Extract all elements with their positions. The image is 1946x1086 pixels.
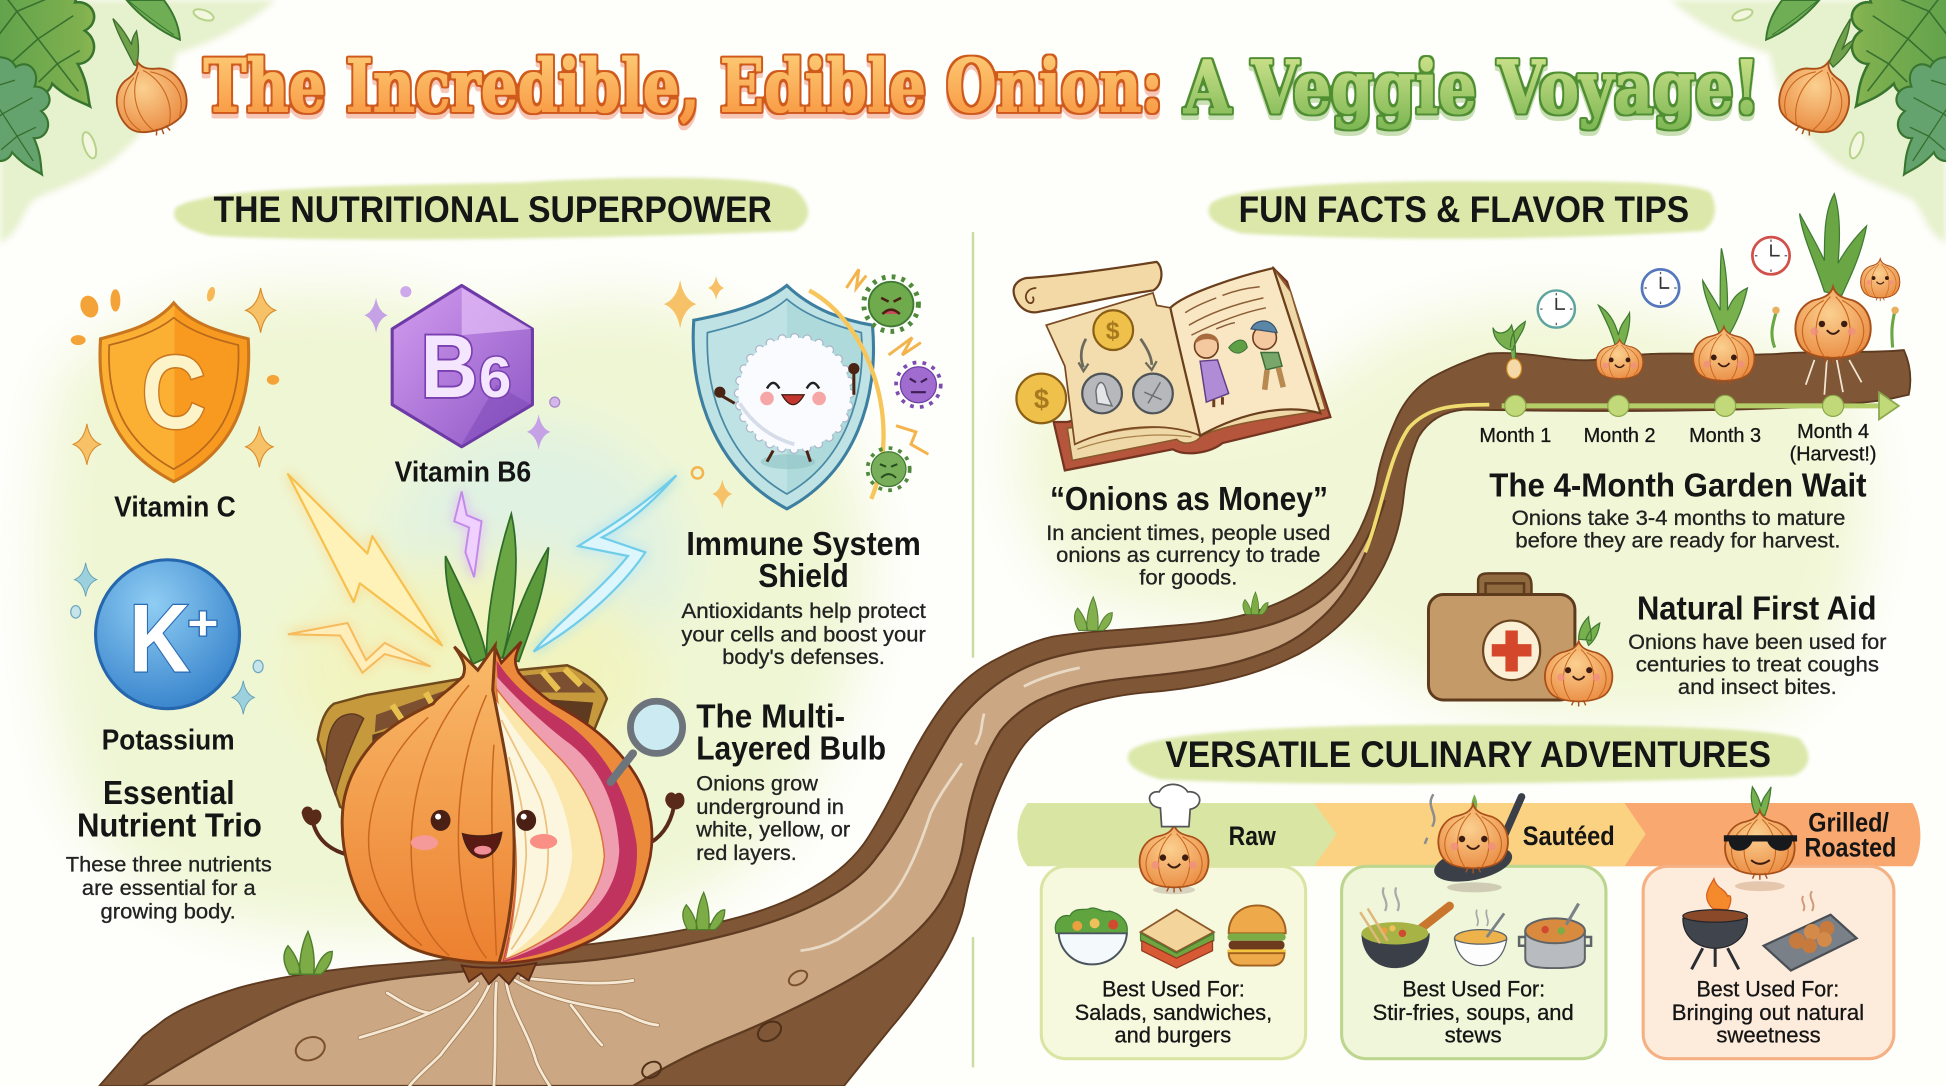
month labels: Month 4	[1797, 420, 1869, 443]
icon: wok	[1360, 887, 1450, 968]
chart: growth timeline	[1479, 194, 1900, 465]
text block: garden wait: before they are ready for harvest.	[1515, 529, 1841, 552]
card text: Best Used For:	[1402, 977, 1545, 1002]
panel: sauteed card	[1342, 794, 1606, 1059]
panel: fun facts heading: FUN FACTS & FLAVOR TIPS	[1239, 188, 1689, 230]
timeline arrow with month nodes	[1502, 392, 1899, 420]
chart: cooking method banner	[1017, 803, 1920, 866]
panel: nutritional superpower heading: THE NUTRITIONAL SUPERPOWER	[213, 188, 772, 230]
road highlights	[800, 668, 1080, 951]
text block: essential nutrient trio: Essential	[103, 775, 235, 812]
text block: garden wait	[1489, 467, 1867, 552]
book cover	[1054, 268, 1330, 470]
month labels: (Harvest!)	[1790, 442, 1876, 465]
card text: Best Used For:	[1102, 977, 1245, 1002]
icon: burger	[1227, 905, 1286, 966]
trading people	[1195, 334, 1218, 358]
tan inner road	[143, 500, 1385, 1086]
scroll	[1014, 262, 1161, 312]
onion right half with red layers	[493, 642, 652, 963]
icon: title onion right	[1769, 19, 1861, 146]
text block: multi-layered bulb	[695, 698, 886, 865]
label: sauteed: Sautéed	[1523, 821, 1615, 851]
icon: history book with coins: $	[1106, 318, 1120, 345]
magnifying glass	[611, 701, 683, 782]
text block: multi-layered bulb: underground in	[696, 796, 844, 819]
watercolor wash: nutrition area	[45, 291, 868, 934]
text block: essential nutrient trio	[66, 775, 272, 923]
icon: potassium circle: +	[187, 596, 218, 649]
text block: natural first aid: Onions have been used for	[1628, 631, 1886, 654]
text block: multi-layered bulb: Onions grow	[696, 773, 819, 796]
card text	[1373, 977, 1574, 1048]
month 2 onion	[1596, 305, 1643, 382]
text block: immune system shield: Immune System	[686, 526, 921, 563]
label: grilled roasted: Roasted	[1805, 832, 1896, 862]
coins	[1093, 310, 1133, 350]
icon: title onion left	[105, 19, 196, 146]
panel: culinary adventures heading: VERSATILE CULINARY ADVENTURES	[1165, 733, 1771, 775]
card text: and burgers	[1114, 1023, 1231, 1048]
onion stages	[1493, 194, 1899, 395]
divider	[972, 232, 974, 1067]
brown path: the voyage road	[99, 350, 1910, 1086]
text block: garden wait: Onions take 3-4 months to mature	[1512, 507, 1845, 530]
panel: fun facts heading	[1208, 181, 1715, 239]
text block: garden wait: The 4-Month Garden Wait	[1489, 467, 1867, 504]
icon: onion in frying pan	[1425, 794, 1522, 892]
month 1 sprout	[1493, 321, 1525, 379]
icon: grill	[1683, 879, 1747, 969]
icon: history book with coins	[1014, 262, 1330, 470]
text block: immune system shield: Antioxidants help protect	[681, 600, 926, 623]
panel: culinary adventures heading	[1128, 725, 1808, 784]
label: raw: Raw	[1229, 821, 1276, 851]
month 4 onion	[1772, 194, 1899, 395]
panel: grilled card	[1643, 787, 1894, 1059]
yellow route line	[1365, 405, 1489, 552]
decorative corner: top right leaves	[1670, 0, 1946, 243]
icon: onion mascot explorer	[302, 514, 684, 1086]
label: vitamin B6: Vitamin B6	[395, 457, 531, 489]
card text: sweetness	[1716, 1023, 1821, 1048]
title: A Veggie Voyage!	[1183, 45, 1760, 131]
text block: immune system shield	[681, 526, 926, 669]
icon: stew pot	[1519, 904, 1591, 968]
text block: immune system shield: your cells and boost your	[681, 624, 926, 647]
icon: vitamin C shield	[71, 286, 279, 482]
card text: Salads, sandwiches,	[1075, 1000, 1272, 1025]
icon: immune shield with cell and germs	[664, 269, 941, 509]
icon: first aid kit with onion	[1428, 573, 1612, 706]
card text	[1075, 977, 1272, 1048]
icon: vitamin B6 hexagon	[364, 285, 560, 450]
text block: onions as money: for goods.	[1139, 567, 1237, 590]
text block: natural first aid	[1628, 590, 1886, 699]
right page	[1170, 268, 1320, 436]
month 3 onion	[1693, 248, 1754, 385]
text block: natural first aid: and insect bites.	[1678, 676, 1837, 699]
arms	[313, 807, 674, 855]
small floating onion	[1861, 259, 1900, 301]
text block: multi-layered bulb: The Multi-	[696, 698, 845, 735]
month labels: Month 1	[1479, 424, 1551, 447]
text block: onions as money: “Onions as Money”	[1050, 481, 1328, 518]
label: grilled roasted	[1805, 808, 1896, 862]
icon: salad	[1055, 908, 1127, 964]
backpack chest	[318, 665, 607, 819]
text block: essential nutrient trio: These three nutrients	[66, 853, 272, 876]
label: grilled roasted: Grilled/	[1808, 808, 1889, 838]
onion left half	[342, 645, 514, 963]
card text: Best Used For:	[1697, 977, 1839, 1002]
sprout leaves	[445, 556, 486, 664]
text block: immune system shield: body's defenses.	[722, 646, 885, 669]
icon: roasting tray	[1764, 891, 1857, 971]
card text: stews	[1445, 1023, 1502, 1048]
grass tufts	[284, 592, 1268, 974]
card text: Bringing out natural	[1672, 1000, 1864, 1025]
watercolor wash: facts area	[1018, 307, 1867, 719]
decorative corner: top left leaves	[0, 0, 276, 243]
text block: essential nutrient trio: growing body.	[101, 900, 236, 923]
icon: vitamin B6 hexagon: B	[421, 316, 478, 416]
icon: vitamin B6 hexagon: 6	[479, 346, 511, 410]
icon: vitamin C shield: C	[141, 335, 206, 451]
icon: potassium circle: K	[129, 583, 190, 692]
icon: energy bolts	[288, 474, 676, 673]
text block: onions as money: In ancient times, people used	[1046, 522, 1330, 545]
card text: Stir-fries, soups, and	[1373, 1000, 1574, 1025]
icon: potassium circle	[71, 560, 263, 714]
text block: immune system shield: Shield	[758, 558, 849, 595]
label: potassium: Potassium	[102, 725, 235, 757]
text block: onions as money: onions as currency to trade	[1056, 544, 1321, 567]
panel: raw card	[1041, 784, 1306, 1059]
clocks	[1538, 237, 1790, 328]
month labels	[1479, 420, 1876, 465]
text block: multi-layered bulb: Layered Bulb	[696, 731, 886, 768]
icon: chef onion	[1140, 784, 1209, 894]
panel: nutritional superpower heading	[174, 178, 808, 240]
page block	[1067, 268, 1325, 460]
mascot face	[431, 810, 451, 831]
text block: essential nutrient trio: are essential for a	[82, 877, 256, 900]
text block: natural first aid: Natural First Aid	[1637, 590, 1876, 627]
text block: multi-layered bulb: white, yellow, or	[695, 819, 850, 842]
icon: soup	[1455, 910, 1507, 966]
month labels: Month 2	[1584, 424, 1656, 447]
label: vitamin C: Vitamin C	[114, 491, 236, 523]
title: The Incredible, Edible Onion:	[204, 44, 1163, 130]
roots	[360, 978, 658, 1086]
icon: sandwich	[1141, 910, 1214, 968]
text block: essential nutrient trio: Nutrient Trio	[77, 808, 262, 845]
icon: sunglasses onion	[1724, 787, 1797, 891]
text block: multi-layered bulb: red layers.	[696, 842, 797, 865]
card text	[1672, 977, 1864, 1048]
left page	[1046, 293, 1200, 444]
icon: history book with coins: $	[1034, 383, 1049, 414]
month labels: Month 3	[1689, 424, 1761, 447]
text block: onions as money	[1046, 481, 1330, 590]
text block: natural first aid: centuries to treat coughs	[1636, 653, 1879, 676]
